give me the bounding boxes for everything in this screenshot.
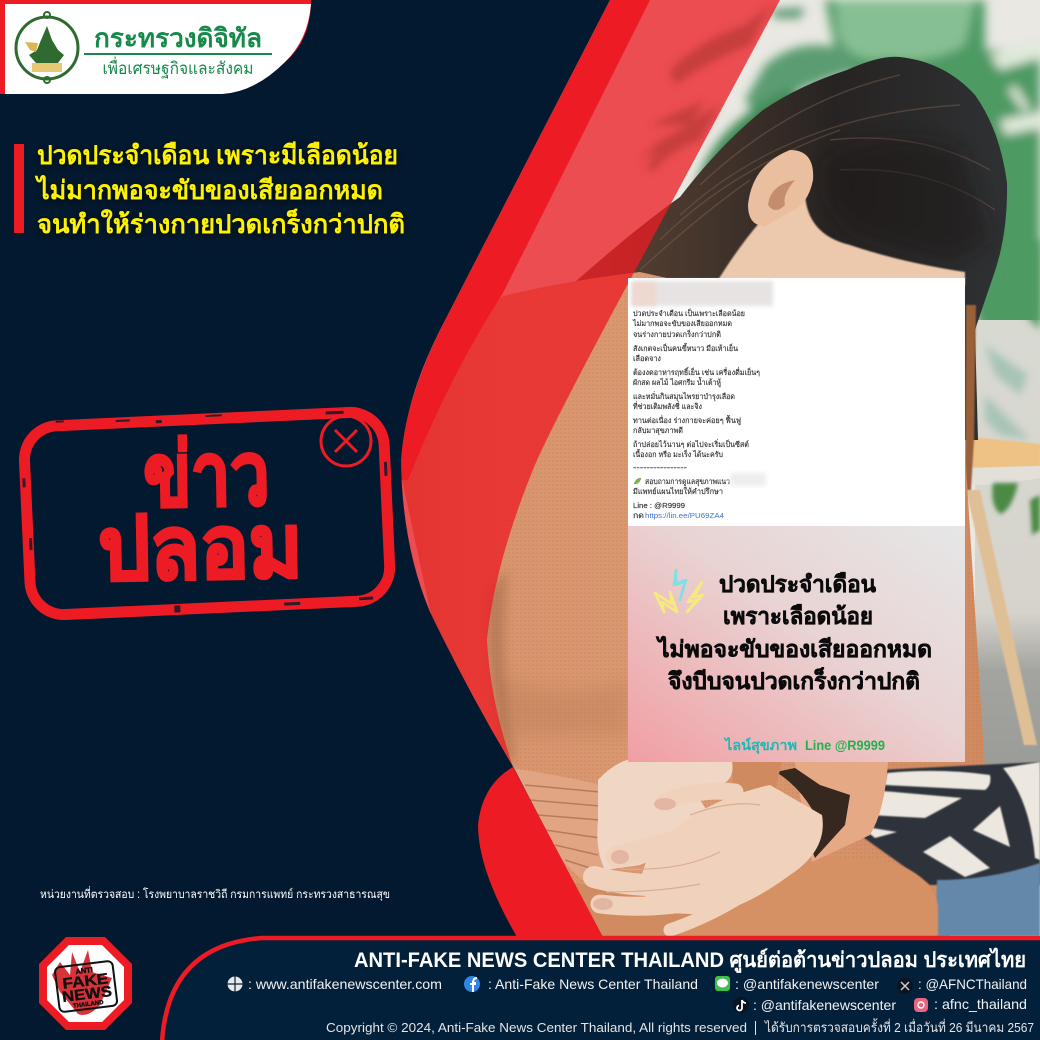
logo: Anti Fake News Thailand: ANTI — [75, 965, 93, 976]
lower body: pillow, jeans, sleeve — [510, 762, 1040, 936]
lower red curve — [478, 767, 603, 937]
quote text: จึงบีบจนปวดเกร็งกว่าปกติ — [667, 666, 920, 694]
post text: เนื้องอก หรือ มะเร็ง ได้นะครับ — [633, 449, 723, 459]
post text: ทานต่อเนื่อง ร่างกายจะค่อยๆ ฟื้นฟู — [633, 415, 741, 425]
post text: ไม่มากพอจะขับของเสียออกหมด — [632, 319, 732, 328]
solid red stripe — [395, 0, 650, 480]
screenshot card — [628, 278, 965, 762]
plant leaves — [695, 0, 1040, 330]
post text: สอบถามการดูแลสุขภาพแนว — [645, 477, 730, 486]
headline: ปวดประจำเดือน เพราะมีเลือดน้อย — [37, 140, 398, 170]
right wall, chair and table — [966, 240, 1040, 770]
stamp: fake news — [20, 406, 393, 619]
post text: สังเกตจะเป็นคนขี้หนาว มือเท้าเย็น — [633, 343, 738, 353]
post text: มีแพทย์แผนไทยให้คำปรึกษา — [633, 487, 723, 496]
ministry tagline: เพื่อเศรษฐกิจและสังคม — [102, 56, 254, 79]
line id: Line @R9999 — [805, 737, 885, 753]
post text: ที่ช่วยเติมพลังชี่ และจิง — [633, 401, 702, 411]
headline: จนทำให้ร่างกายปวดเกร็งกว่าปกติ — [37, 208, 405, 239]
stamp word 1: ข่าว — [143, 424, 270, 525]
sweater — [400, 272, 985, 936]
icon: ministry emblem — [16, 12, 78, 83]
photo: woman holding stomach — [400, 0, 1040, 940]
logo: Anti Fake News Thailand: NEWS — [61, 983, 113, 1006]
quote text: ไม่พอจะขับของเสียออกหมด — [655, 635, 932, 662]
contact links: : @antifakenewscenter — [753, 997, 896, 1013]
post text: จนร่างกายปวดเกร็งกว่าปกติ — [633, 329, 721, 339]
source agency line: หน่วยงานที่ตรวจสอบ : โรงพยาบาลราชวิถี กรมการแพทย์ กระทรวงสาธารณสุข — [40, 886, 390, 901]
face skin and ear — [718, 150, 965, 285]
navy panel edge — [0, 0, 610, 940]
contact links — [227, 976, 1027, 1013]
quote text: ปวดประจำเดือน — [719, 571, 876, 597]
contact links: : afnc_thailand — [934, 996, 1027, 1012]
post text — [632, 308, 760, 520]
hair — [575, 57, 1007, 490]
icon: cross in circle — [321, 416, 371, 466]
quote text — [655, 571, 932, 694]
stamp word 2: ปลอม — [98, 496, 303, 599]
icon: lightning bolts — [655, 570, 703, 612]
post text: ถ้าปล่อยไว้นานๆ ต่อไปจะเริ่มเป็นซีสต์ — [633, 439, 749, 449]
post text: Line : @R9999 — [633, 501, 685, 510]
icon: instagram — [914, 998, 928, 1012]
post text: และหมั่นกินสมุนไพรยาบำรุงเลือด — [633, 391, 735, 401]
line health text: ไลน์สุขภาพ — [723, 736, 797, 754]
logo: Anti Fake News Thailand: THAILAND — [73, 1000, 105, 1010]
post text: https://lin.ee/PU69ZA4 — [645, 511, 724, 520]
ministry name: กระทรวงดิจิทัล — [94, 23, 262, 53]
icon: globe — [227, 976, 243, 992]
footer — [162, 938, 1040, 1040]
post text: ต้องงดอาหารฤทธิ์เย็น เช่น เครื่องดื่มเย็นๆ — [633, 366, 760, 377]
hands — [593, 758, 823, 930]
post text: ---------------- — [633, 463, 688, 472]
logo panel: Ministry of Digital — [0, 0, 311, 94]
icon: tiktok — [733, 997, 749, 1013]
headline — [34, 140, 405, 239]
post text: เลือดจาง — [633, 354, 661, 363]
footer title: ANTI-FAKE NEWS CENTER THAILAND ศูนย์ต่อต้านข่าวปลอม ประเทศไทย — [354, 947, 1026, 974]
post text: กด — [633, 511, 644, 520]
post text: ผักสด ผลไม้ ไอศกรีม น้ำเต้าหู้ — [633, 377, 721, 387]
post text: กลับมาสุขภาพดี — [633, 426, 683, 435]
icon: facebook — [464, 976, 480, 992]
logo: Anti Fake News Thailand — [39, 937, 132, 1030]
post text: ปวดประจำเดือน เป็นเพราะเลือดน้อย — [633, 308, 745, 318]
copyright: Copyright © 2024, Anti-Fake News Center Thailand, All rights reserved — [326, 1020, 747, 1035]
quote text: เพราะเลือดน้อย — [723, 603, 873, 629]
leaf shadows on stripe — [640, 5, 770, 170]
icon: line — [715, 976, 730, 991]
logo: Anti Fake News Thailand: FAKE — [62, 970, 109, 993]
accent bar — [14, 144, 24, 233]
contact links: : @antifakenewscenter — [735, 976, 879, 992]
contact links: : www.antifakenewscenter.com — [248, 976, 442, 992]
icon: x — [897, 978, 913, 994]
contact links: : Anti-Fake News Center Thailand — [488, 976, 698, 992]
contact links: : @AFNCThailand — [918, 976, 1027, 992]
pink quote image — [628, 526, 965, 762]
headline: ไม่มากพอจะขับของเสียออกหมด — [34, 174, 383, 205]
translucent red stripe — [395, 0, 780, 767]
